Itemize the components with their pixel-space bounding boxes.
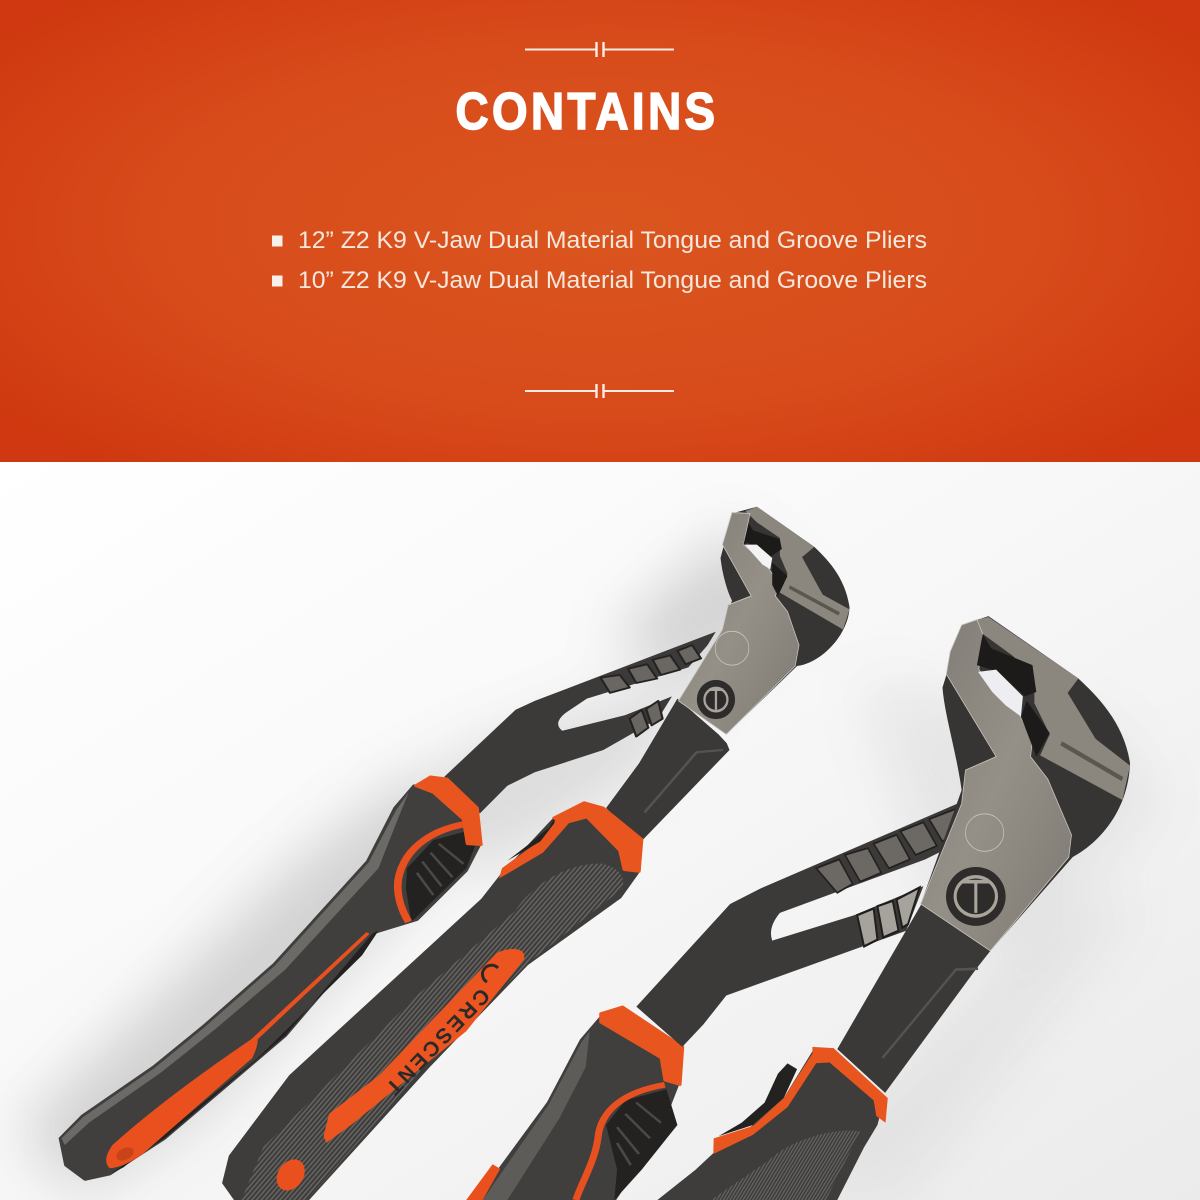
orange collar front <box>554 803 642 871</box>
list item 2: 10” Z2 K9 V-Jaw Dual Material Tongue and Groove Pliers <box>298 267 927 294</box>
dark jaw backing <box>678 507 850 734</box>
orange thumb ridge <box>499 818 570 879</box>
engraved jaw marking <box>789 587 839 614</box>
plier: 12 inch tool, head <box>678 507 850 734</box>
brand wordmark: CRESCENT <box>381 984 494 1099</box>
title: CONTAINS <box>456 83 718 141</box>
second arm <box>837 904 990 1093</box>
grip ribs <box>617 1103 661 1165</box>
orange collar <box>812 1047 888 1123</box>
adjustment ridges <box>601 645 701 737</box>
orange collar <box>416 777 481 845</box>
textured panel <box>241 864 623 1200</box>
top divider <box>525 42 674 57</box>
orange grip outline <box>576 1085 665 1200</box>
logo badge <box>697 680 735 719</box>
front handle <box>224 806 639 1200</box>
jaw gap <box>745 545 772 569</box>
plier: 10 inch tool, handles <box>466 1007 683 1200</box>
logo badge <box>946 867 1006 926</box>
arm with slot <box>444 632 716 813</box>
textured edge <box>61 792 409 1145</box>
textured panel <box>711 1131 860 1200</box>
dark jaw backing <box>921 616 1130 951</box>
top jaw steel <box>745 507 850 629</box>
engraved jaw marking <box>1061 743 1122 779</box>
main steel plate <box>921 620 1071 951</box>
bottom divider <box>525 384 674 398</box>
lower edge orange strip <box>466 1164 500 1200</box>
orange logo panel <box>324 949 524 1143</box>
end hole <box>272 1156 310 1194</box>
rear handle <box>60 786 480 1179</box>
second arm <box>606 699 730 844</box>
orange collar <box>601 1007 683 1085</box>
upper ridges <box>816 809 956 893</box>
black thumb ridges <box>719 1063 797 1136</box>
lower teeth <box>1021 701 1050 757</box>
lower teeth <box>772 562 788 596</box>
black grip <box>606 1089 677 1200</box>
rear handle body <box>477 1018 677 1200</box>
rivet circle <box>715 631 749 665</box>
shadows under pliers <box>20 530 1160 1200</box>
orange stripe <box>106 932 370 1168</box>
jaw teeth <box>744 523 782 558</box>
orange thumb strip <box>713 1054 818 1154</box>
grip hole <box>113 1145 137 1163</box>
plier: 12 inch tool, handles and arms <box>60 632 730 1200</box>
grip ribs <box>417 844 463 895</box>
panel: product photo background <box>0 462 1200 1200</box>
main steel plate <box>678 512 799 734</box>
black thumb ridges <box>507 815 557 861</box>
jaw gap <box>978 670 1023 717</box>
lower black band <box>110 931 378 1174</box>
lower shiny ridges <box>857 887 920 946</box>
plier: 10 inch tool, head and arms <box>636 616 1130 1200</box>
rivet circle <box>965 814 1004 851</box>
arm with slot <box>636 803 960 1047</box>
orange grip outline <box>398 824 467 922</box>
black grip <box>406 831 476 922</box>
textured edge <box>483 1031 590 1200</box>
list item 1: 12” Z2 K9 V-Jaw Dual Material Tongue and Groove Pliers <box>298 227 927 254</box>
brand logo on handle <box>381 965 498 1099</box>
top jaw steel <box>977 617 1130 800</box>
panel: orange contains header <box>0 0 1200 462</box>
jaw teeth <box>977 634 1036 696</box>
front handle body <box>657 1048 885 1200</box>
